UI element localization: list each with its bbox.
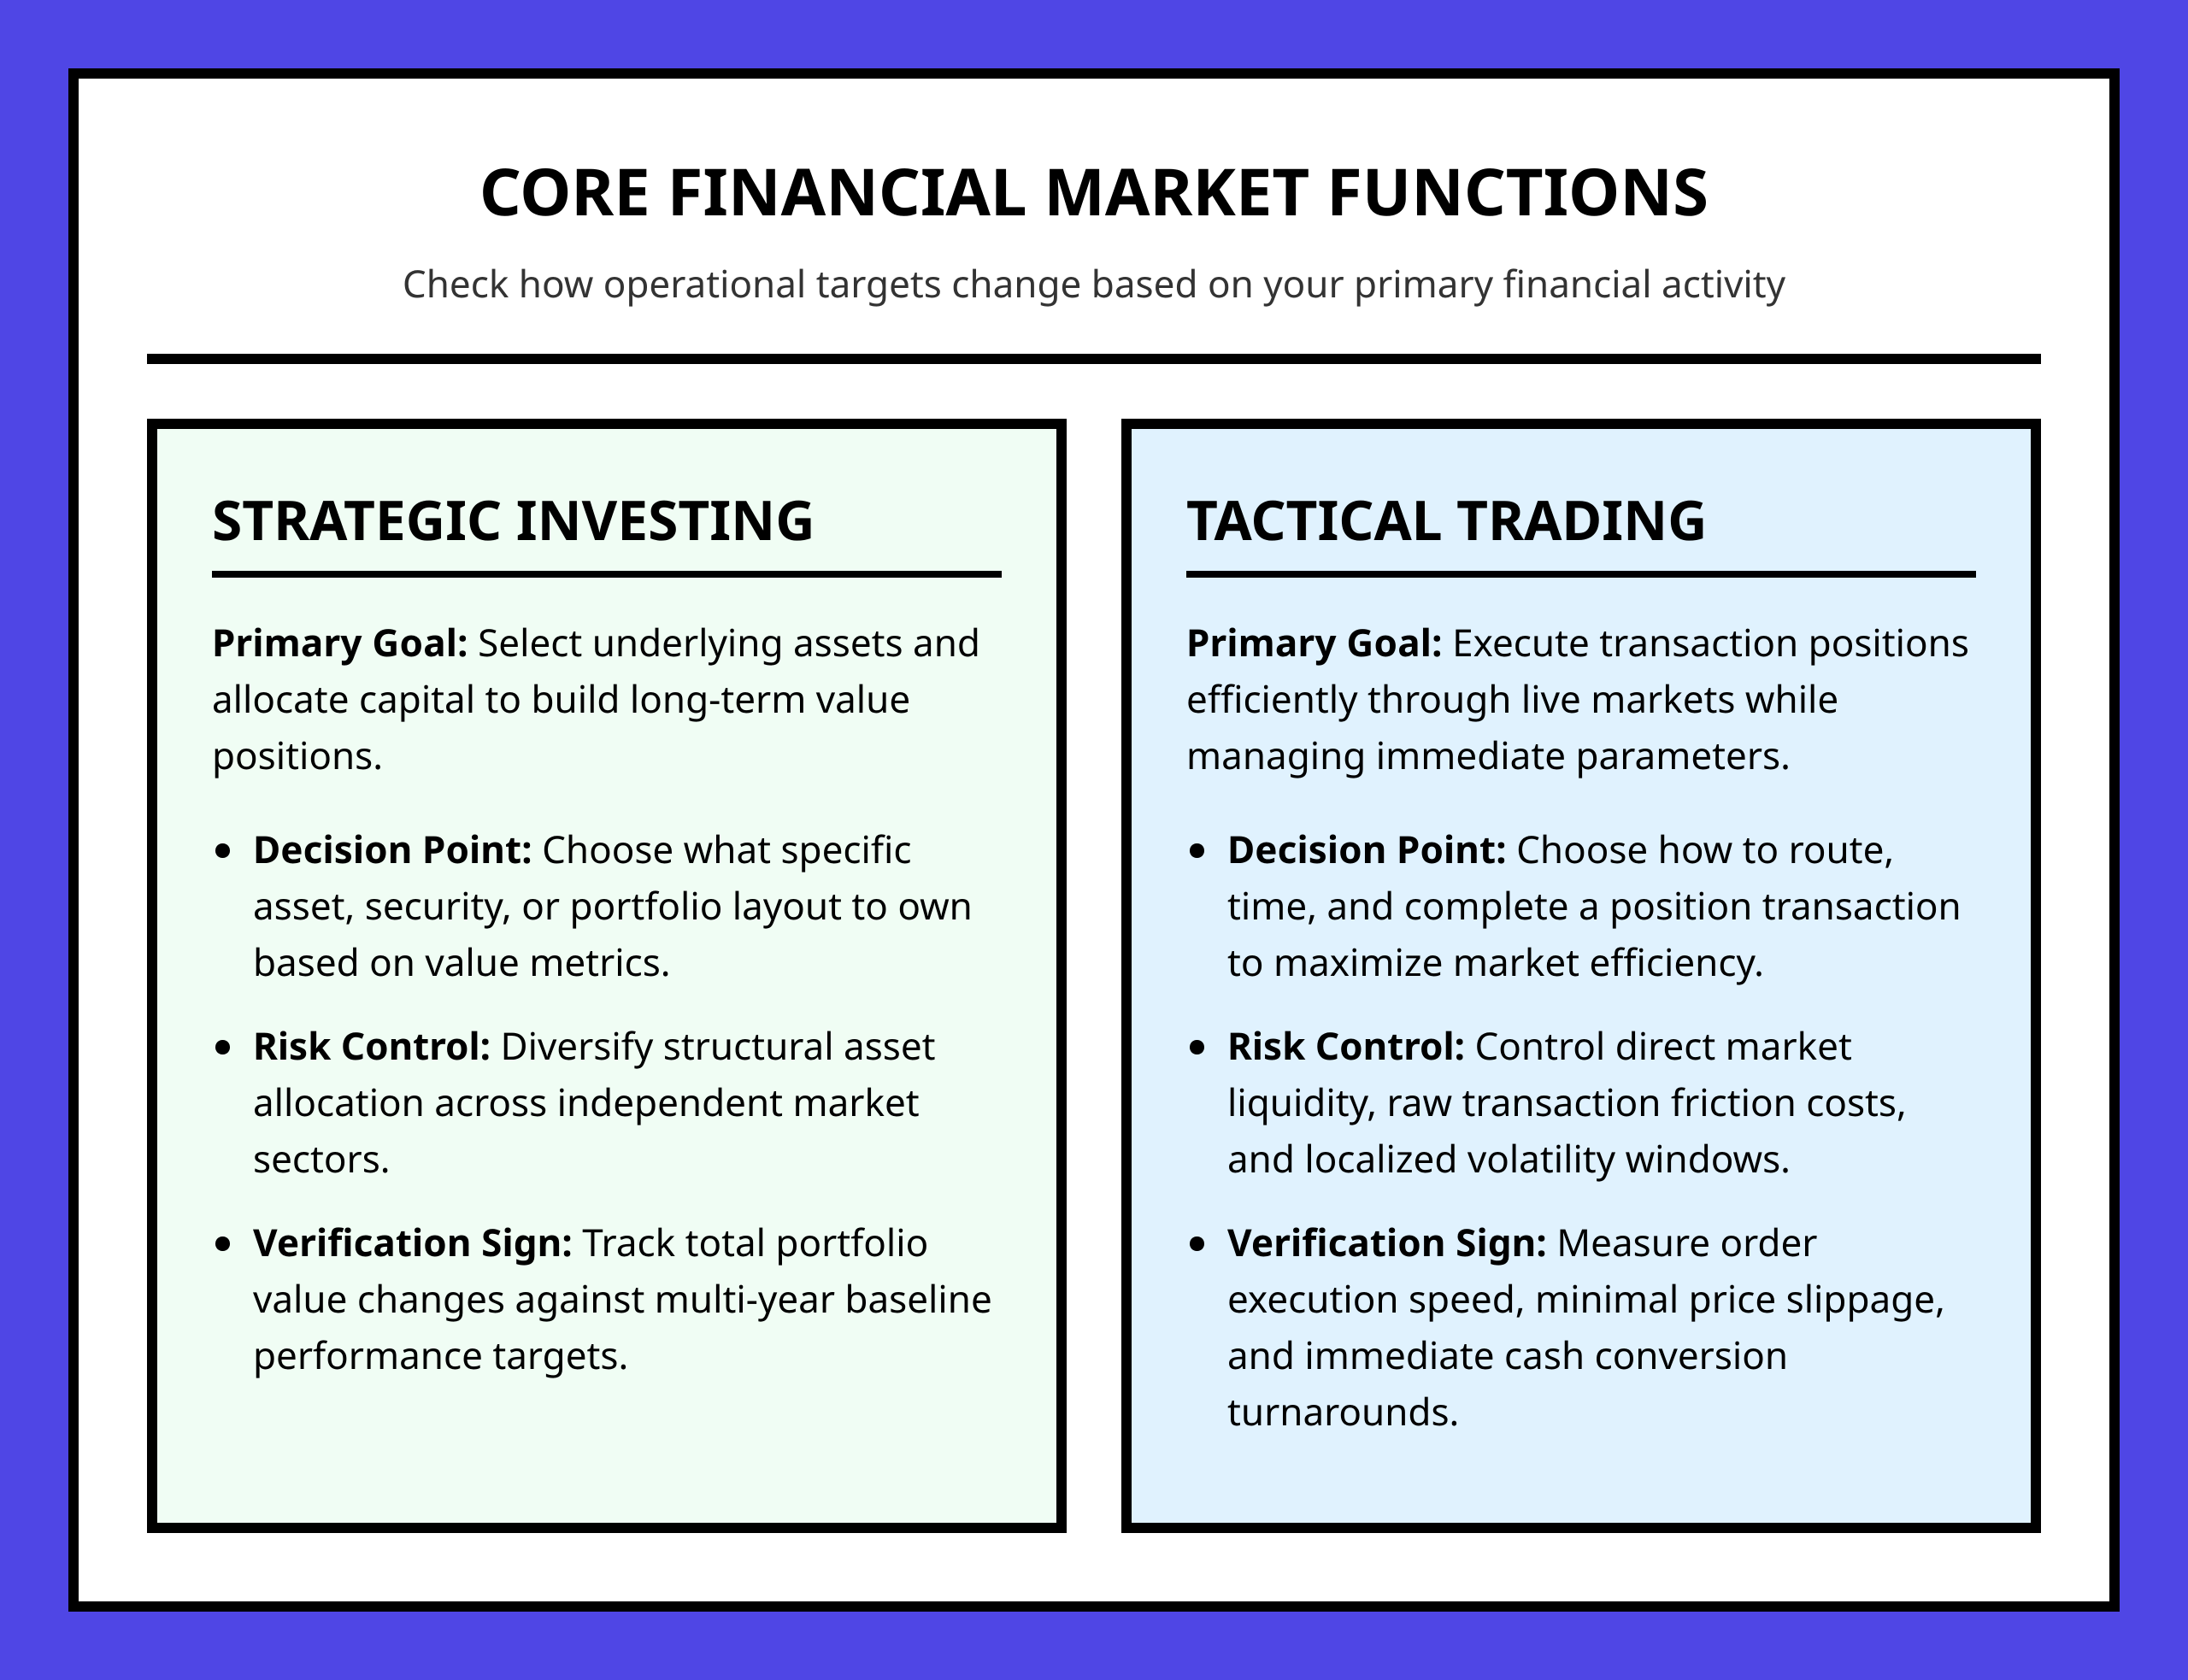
verification sign: performance targets. xyxy=(253,1329,628,1380)
heading: tactical trading: TACTICAL TRADING xyxy=(1186,482,1707,556)
risk control: Risk Control: Diversify structural asset xyxy=(253,1019,936,1071)
decision point: time, and complete a position transaction xyxy=(1227,879,1962,931)
decision point: to maximize market efficiency. xyxy=(1227,936,1764,987)
verification sign: execution speed, minimal price slippage, xyxy=(1227,1272,1945,1324)
decision point: Decision Point: Choose how to route, xyxy=(1227,823,1894,874)
primary goal text: managing immediate parameters. xyxy=(1186,729,1791,780)
primary goal text: Primary Goal: Execute transaction positions xyxy=(1186,616,1969,667)
risk control: liquidity, raw transaction friction costs, xyxy=(1227,1076,1907,1127)
risk control: sectors. xyxy=(253,1132,391,1184)
bullet list xyxy=(215,823,992,1380)
decision point xyxy=(1227,820,1976,990)
title: CORE FINANCIAL MARKET FUNCTIONS xyxy=(479,147,1709,235)
risk control: allocation across independent market xyxy=(253,1076,920,1127)
risk control xyxy=(253,1017,1002,1186)
primary goal text xyxy=(212,616,980,780)
verification sign xyxy=(1227,1213,1976,1439)
decision point xyxy=(253,820,1002,990)
verification sign: and immediate cash conversion xyxy=(1227,1329,1788,1380)
panel: strategic investing xyxy=(147,419,1067,1533)
heading: strategic investing: STRATEGIC INVESTING xyxy=(212,482,815,556)
heading: tactical trading xyxy=(1186,484,1976,578)
verification sign: value changes against multi-year baseline xyxy=(253,1272,992,1324)
header xyxy=(147,137,2041,364)
risk control xyxy=(1227,1017,1976,1186)
bullet list xyxy=(1190,823,1962,1436)
heading: strategic investing xyxy=(212,484,1002,578)
risk control: and localized volatility windows. xyxy=(1227,1132,1791,1184)
primary goal text xyxy=(1186,616,1969,780)
panel: tactical trading xyxy=(1121,419,2041,1533)
verification sign: Verification Sign: Measure order xyxy=(1227,1216,1817,1267)
primary goal text: Primary Goal: Select underlying assets and xyxy=(212,616,980,667)
decision point: asset, security, or portfolio layout to own xyxy=(253,879,973,931)
risk control: Risk Control: Control direct market xyxy=(1227,1019,1852,1071)
decision point: Decision Point: Choose what specific xyxy=(253,823,911,874)
subtitle: Check how operational targets change based on your primary financial activity xyxy=(403,257,1785,308)
primary goal text: efficiently through live markets while xyxy=(1186,673,1838,724)
decision point: based on value metrics. xyxy=(253,936,671,987)
verification sign xyxy=(253,1213,1002,1383)
verification sign: turnarounds. xyxy=(1227,1385,1459,1436)
verification sign: Verification Sign: Track total portfolio xyxy=(253,1216,928,1267)
primary goal text: positions. xyxy=(212,729,383,780)
primary goal text: allocate capital to build long-term value xyxy=(212,673,910,724)
